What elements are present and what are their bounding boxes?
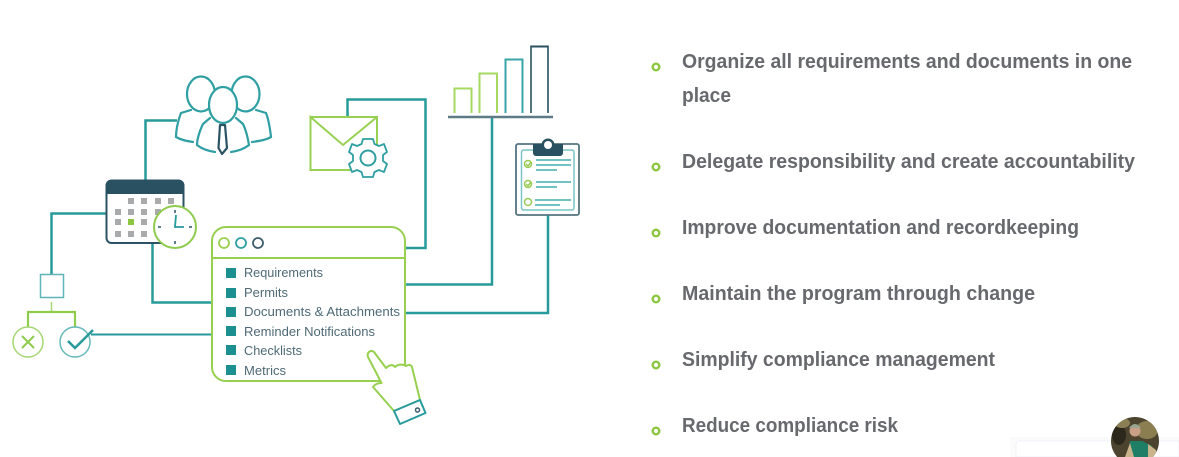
icon: team of people bbox=[176, 76, 271, 154]
avatar photo bbox=[1111, 417, 1159, 457]
panel: application window bbox=[212, 227, 405, 381]
icon: envelope with gear bbox=[310, 117, 387, 177]
icon: pointing hand bbox=[368, 351, 426, 424]
window menu list: Documents & Attachments bbox=[244, 305, 400, 319]
window menu list: Requirements bbox=[244, 266, 323, 280]
bullet item 1: Organize all requirements and documents in one bbox=[682, 51, 1132, 73]
window menu list: Checklists bbox=[244, 344, 302, 358]
connector lines bbox=[52, 100, 548, 334]
chat widget card bbox=[1010, 437, 1179, 457]
window menu list: Reminder Notifications bbox=[244, 325, 375, 339]
bullet item 4: Maintain the program through change bbox=[682, 283, 1035, 305]
bullet item 3: Improve documentation and recordkeeping bbox=[682, 217, 1079, 239]
window menu list: Metrics bbox=[244, 364, 286, 378]
window menu list bbox=[244, 266, 400, 378]
bar chart icon bbox=[448, 46, 553, 117]
bullet item 6: Reduce compliance risk bbox=[682, 415, 899, 437]
bullet item 1: place bbox=[682, 85, 731, 107]
window menu list: Permits bbox=[244, 286, 288, 300]
bullet item 1 bbox=[653, 51, 1132, 107]
icon: clipboard checklist bbox=[516, 138, 579, 215]
icon: decision tree bbox=[13, 274, 93, 357]
bullet item 2: Delegate responsibility and create accountability bbox=[682, 151, 1136, 173]
benefits list bbox=[653, 51, 1136, 437]
icon: calendar with clock bbox=[106, 180, 196, 248]
bullet item 5: Simplify compliance management bbox=[682, 349, 995, 371]
